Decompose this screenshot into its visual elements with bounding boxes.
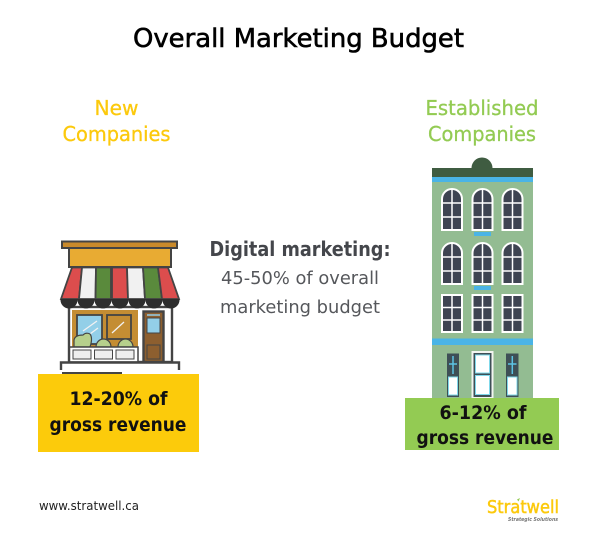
text block: digital marketing: 45-50% of overall — [221, 268, 379, 289]
heading: new companies: Companies — [62, 122, 170, 146]
logo: stratwell: Strategic Solutions — [508, 517, 559, 523]
icon: office building — [432, 158, 533, 398]
website url: www.stratwell.ca — [39, 498, 139, 513]
callout: established companies revenue: gross revenue — [416, 427, 554, 449]
callout: new companies revenue — [38, 374, 199, 452]
heading: new companies: New — [94, 96, 138, 120]
heading: established companies — [426, 96, 538, 146]
text block: digital marketing: marketing budget — [220, 297, 380, 318]
logo: stratwell: Stratwell — [487, 498, 559, 518]
heading: established companies: Established — [426, 96, 538, 120]
callout: new companies revenue: 12-20% of — [70, 388, 168, 410]
heading: new companies — [62, 96, 170, 146]
text block: digital marketing — [210, 237, 390, 318]
callout: established companies revenue: 6-12% of — [440, 402, 527, 424]
heading: established companies: Companies — [428, 122, 536, 146]
callout: established companies revenue — [405, 398, 559, 450]
callout: new companies revenue: gross revenue — [50, 414, 186, 436]
title: Overall Marketing Budget — [133, 24, 464, 54]
icon: storefront — [60, 242, 180, 373]
text block: digital marketing: Digital marketing: — [210, 237, 390, 261]
